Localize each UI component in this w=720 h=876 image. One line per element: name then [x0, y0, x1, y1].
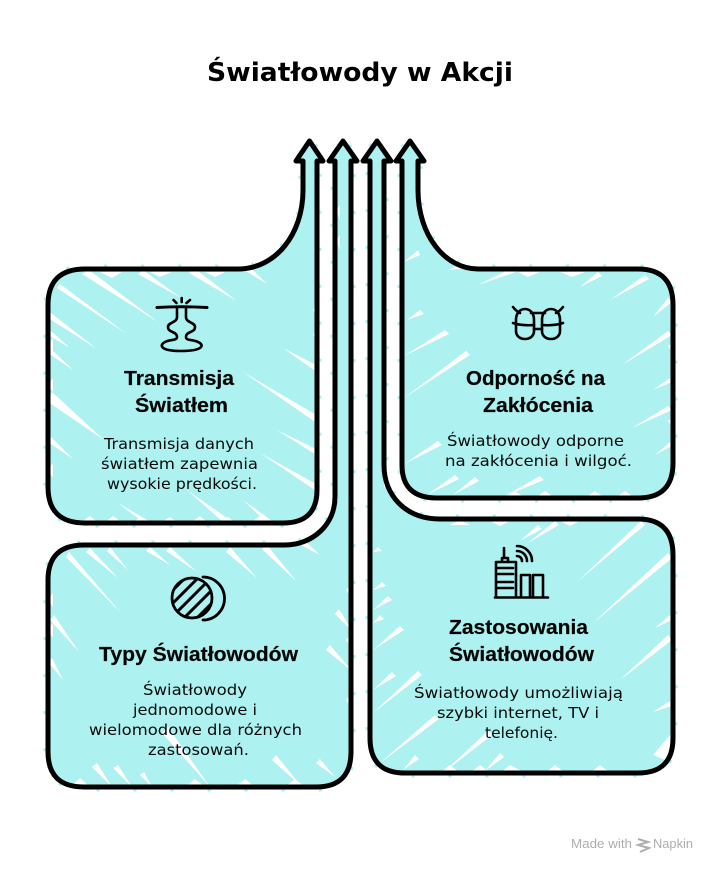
- title: Światłowody w Akcji: [207, 56, 513, 88]
- heading: Światłowodów: [449, 642, 594, 666]
- heading: Światłem: [135, 393, 228, 417]
- description: zastosowań.: [148, 741, 249, 759]
- icon: light through fibre: [157, 298, 207, 351]
- heading: [466, 367, 606, 417]
- heading: Typy Światłowodów: [99, 642, 298, 666]
- description: Światłowody: [143, 680, 247, 699]
- heading: [124, 367, 235, 417]
- arrow 1 outline: [48, 141, 323, 523]
- description: jednomodowe i: [132, 701, 257, 719]
- icon: protective shields: [513, 307, 563, 339]
- panel: Transmisja Światłem: [48, 141, 323, 523]
- description: [89, 680, 302, 759]
- icon: city with signal: [495, 546, 548, 598]
- heading: Zastosowania: [449, 616, 589, 639]
- description: światłem zapewnia: [101, 455, 258, 473]
- description: telefonię.: [485, 724, 558, 742]
- description: [414, 683, 623, 742]
- description: na zakłócenia i wilgoć.: [445, 452, 632, 470]
- description: [445, 431, 632, 470]
- heading: Transmisja: [124, 367, 235, 390]
- description: szybki internet, TV i: [437, 704, 599, 722]
- heading: [449, 616, 594, 666]
- description: Światłowody odporne: [447, 431, 624, 450]
- arrow 4 outline: [396, 141, 673, 498]
- icon: fibre types: [170, 576, 226, 622]
- panel: Typy Światłowodów: [48, 141, 357, 787]
- description: Światłowody umożliwiają: [414, 683, 623, 702]
- description: [101, 435, 258, 493]
- footer credit: Made with: [571, 836, 632, 851]
- panel: Odporność na Zakłócenia: [396, 141, 673, 498]
- description: wielomodowe dla różnych: [89, 721, 302, 739]
- description: Transmisja danych: [103, 435, 254, 453]
- panel: Zastosowania Światłowodów: [363, 141, 674, 773]
- footer credit: Napkin: [653, 836, 693, 851]
- arrow 2 outline: [48, 141, 357, 787]
- heading: Zakłócenia: [483, 394, 594, 417]
- heading: Odporność na: [466, 367, 606, 390]
- footer credit: [571, 836, 693, 852]
- arrow 3 outline: [363, 141, 673, 773]
- description: wysokie prędkości.: [107, 475, 257, 493]
